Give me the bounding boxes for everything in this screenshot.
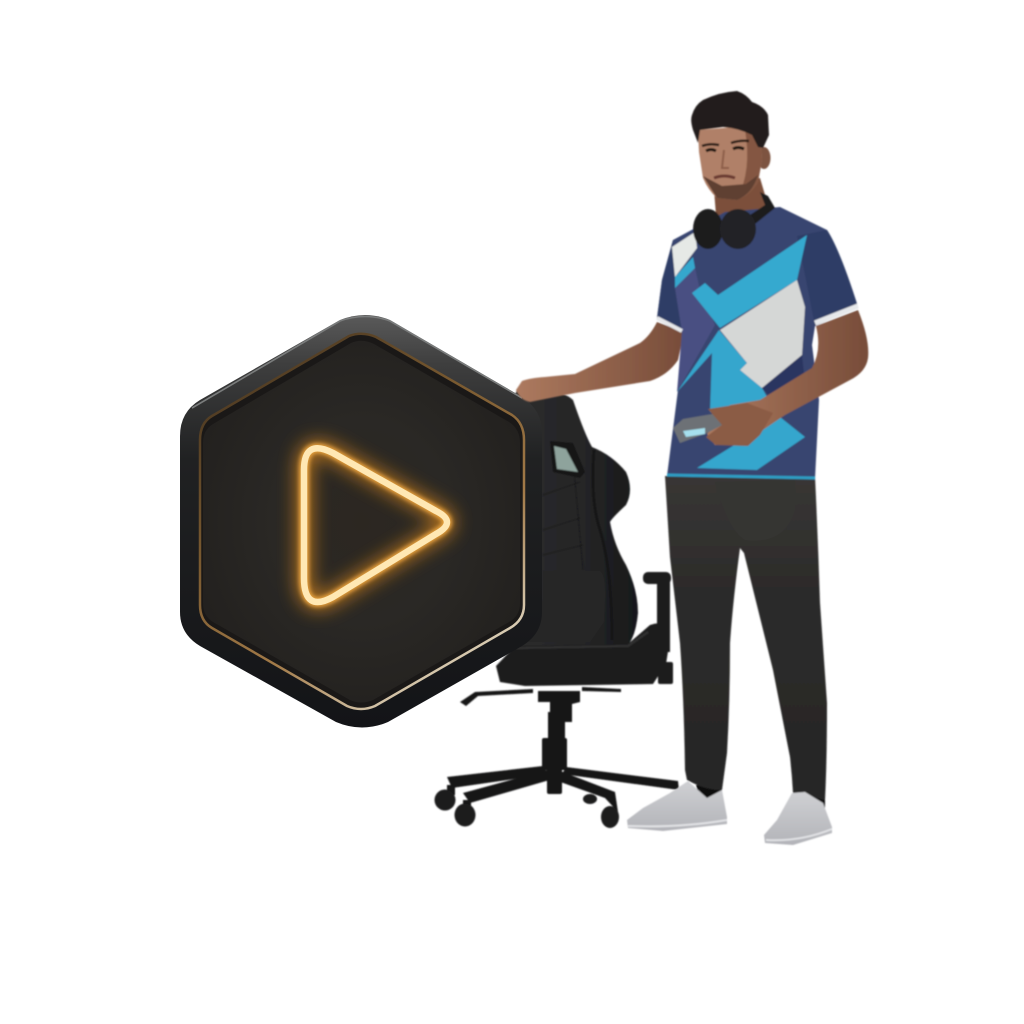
hand over controller (706, 403, 773, 446)
face side shadow (737, 128, 762, 200)
arm resting on chair (516, 322, 684, 402)
chair base with five legs (447, 687, 679, 812)
neck (714, 178, 768, 225)
lumbar pillow (528, 571, 605, 642)
mouth (714, 176, 735, 178)
right shoe (764, 792, 832, 845)
left chest lighter panel (672, 268, 715, 392)
shirt base (657, 207, 858, 479)
chair casters (434, 790, 619, 828)
t-shirt (657, 207, 858, 479)
light grey panel (720, 280, 805, 388)
lower cyan panel (677, 330, 770, 420)
badge frame highlight (192, 316, 522, 408)
large cyan band (692, 235, 807, 328)
gaming chair (434, 390, 679, 828)
neon play icon (304, 448, 447, 602)
standing gamer (516, 91, 868, 845)
seat highlight (516, 632, 648, 648)
play icon bright tube (304, 448, 447, 602)
chair seat (496, 623, 669, 686)
bottom cyan wedge (697, 417, 805, 470)
left sleeve cuff (657, 318, 682, 331)
hexagon play badge (180, 315, 542, 728)
head (691, 91, 770, 200)
backrest centre stitching (543, 470, 583, 570)
trouser pocket fold (715, 480, 795, 541)
armrest (643, 572, 673, 684)
chair backrest (500, 390, 638, 650)
left shoe (627, 781, 727, 831)
right sleeve cuff (815, 306, 858, 323)
sleeve shading (797, 230, 858, 326)
headrest slot light (554, 446, 578, 472)
trousers (665, 476, 827, 800)
hair (691, 91, 769, 148)
small cyan stripe (675, 257, 695, 288)
backrest side bolster line (593, 450, 612, 640)
right arm holding controller (707, 310, 868, 445)
headband (750, 192, 775, 224)
headrest slot (550, 441, 585, 478)
badge inner panel (203, 341, 520, 702)
nose shadow (722, 150, 729, 168)
badge recess (200, 334, 524, 709)
ankle socks (696, 785, 825, 808)
game controller (673, 411, 732, 443)
badge outer frame (180, 315, 542, 728)
shoe soles (628, 820, 832, 840)
play icon outer glow (304, 448, 447, 602)
controller body (673, 411, 732, 443)
hem trim (667, 475, 815, 478)
dark navy block (762, 355, 804, 397)
right ear cup (720, 209, 756, 249)
face (698, 125, 762, 200)
left sleeve shading (657, 240, 682, 332)
eyebrows (702, 141, 749, 146)
ear (758, 147, 770, 169)
play icon orange halo (304, 448, 447, 602)
controller light bar (683, 428, 705, 437)
beard shadow (703, 175, 758, 200)
left ear cup (693, 209, 723, 249)
white shoulder panel (672, 232, 697, 277)
eyes (706, 148, 744, 151)
headphones around neck (693, 192, 775, 249)
